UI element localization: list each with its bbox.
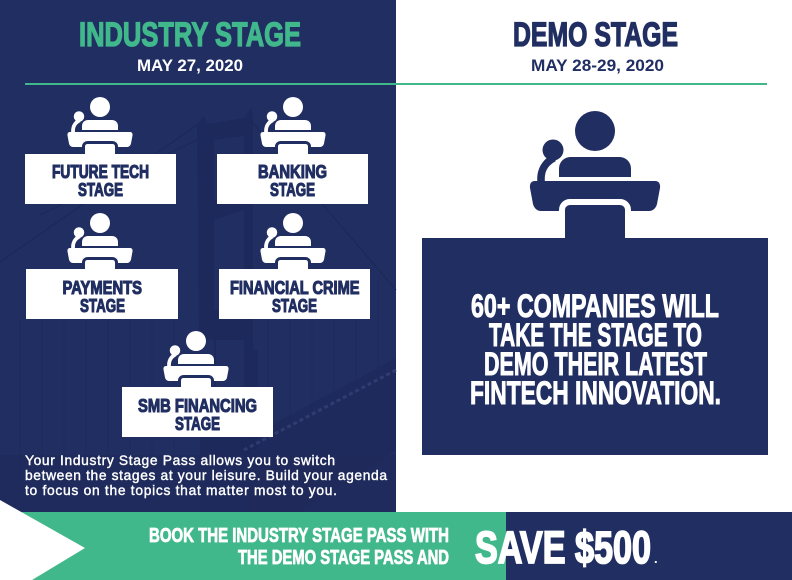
label box: STAGE bbox=[272, 295, 317, 316]
icon: large speaker at podium bbox=[530, 111, 660, 241]
label box: PAYMENTS bbox=[62, 277, 142, 298]
icon: speaker at podium bbox=[163, 331, 229, 396]
banner text bbox=[149, 524, 449, 569]
banner text: THE DEMO STAGE PASS AND bbox=[238, 546, 449, 569]
label box: FINANCIAL CRIME bbox=[230, 277, 360, 298]
bridge photo silhouette bbox=[0, 107, 396, 512]
callout text bbox=[470, 288, 721, 411]
label box bbox=[219, 269, 370, 319]
stage: smb financing bbox=[122, 331, 273, 437]
stage: payments bbox=[26, 213, 178, 319]
icon: speaker at podium bbox=[67, 97, 133, 162]
label box: STAGE bbox=[80, 295, 125, 316]
label box: BANKING bbox=[258, 161, 327, 182]
label box: SMB FINANCING bbox=[138, 395, 257, 416]
icon: speaker at podium bbox=[260, 213, 326, 278]
icon: speaker at podium bbox=[67, 213, 133, 278]
banner text: BOOK THE INDUSTRY STAGE PASS WITH bbox=[149, 524, 449, 547]
label box: STAGE bbox=[78, 179, 123, 200]
date: may 28-29: MAY 28-29, 2020 bbox=[531, 57, 664, 75]
text block: pass description: between the stages at your leisure. Build your agenda bbox=[25, 468, 387, 483]
banner: save offer bbox=[0, 500, 792, 580]
label box bbox=[217, 154, 368, 204]
label box: STAGE bbox=[175, 413, 220, 434]
text block: pass description: to focus on the topics that matter most to you. bbox=[25, 483, 337, 498]
heading: industry stage: INDUSTRY STAGE bbox=[79, 16, 301, 54]
label box: STAGE bbox=[270, 179, 315, 200]
period: . bbox=[654, 551, 658, 566]
text block: pass description bbox=[25, 453, 387, 498]
date: may 27: MAY 27, 2020 bbox=[137, 57, 243, 75]
label box: FUTURE TECH bbox=[52, 161, 149, 182]
divider line bbox=[25, 83, 767, 85]
label box bbox=[26, 269, 178, 319]
panel: demo stage callout bbox=[422, 238, 768, 455]
stage: banking bbox=[217, 97, 368, 204]
savings amount: SAVE $500 bbox=[475, 522, 651, 573]
stage: financial crime bbox=[219, 213, 370, 319]
text block: pass description: Your Industry Stage Pass allows you to switch bbox=[25, 453, 335, 468]
arrow: white pointer bbox=[0, 500, 85, 580]
heading: demo stage: DEMO STAGE bbox=[513, 16, 678, 54]
icon: speaker at podium bbox=[260, 97, 326, 162]
label box bbox=[25, 154, 176, 204]
label box bbox=[122, 387, 273, 437]
stage: future tech bbox=[25, 97, 176, 204]
panel: industry stage background bbox=[0, 0, 396, 512]
